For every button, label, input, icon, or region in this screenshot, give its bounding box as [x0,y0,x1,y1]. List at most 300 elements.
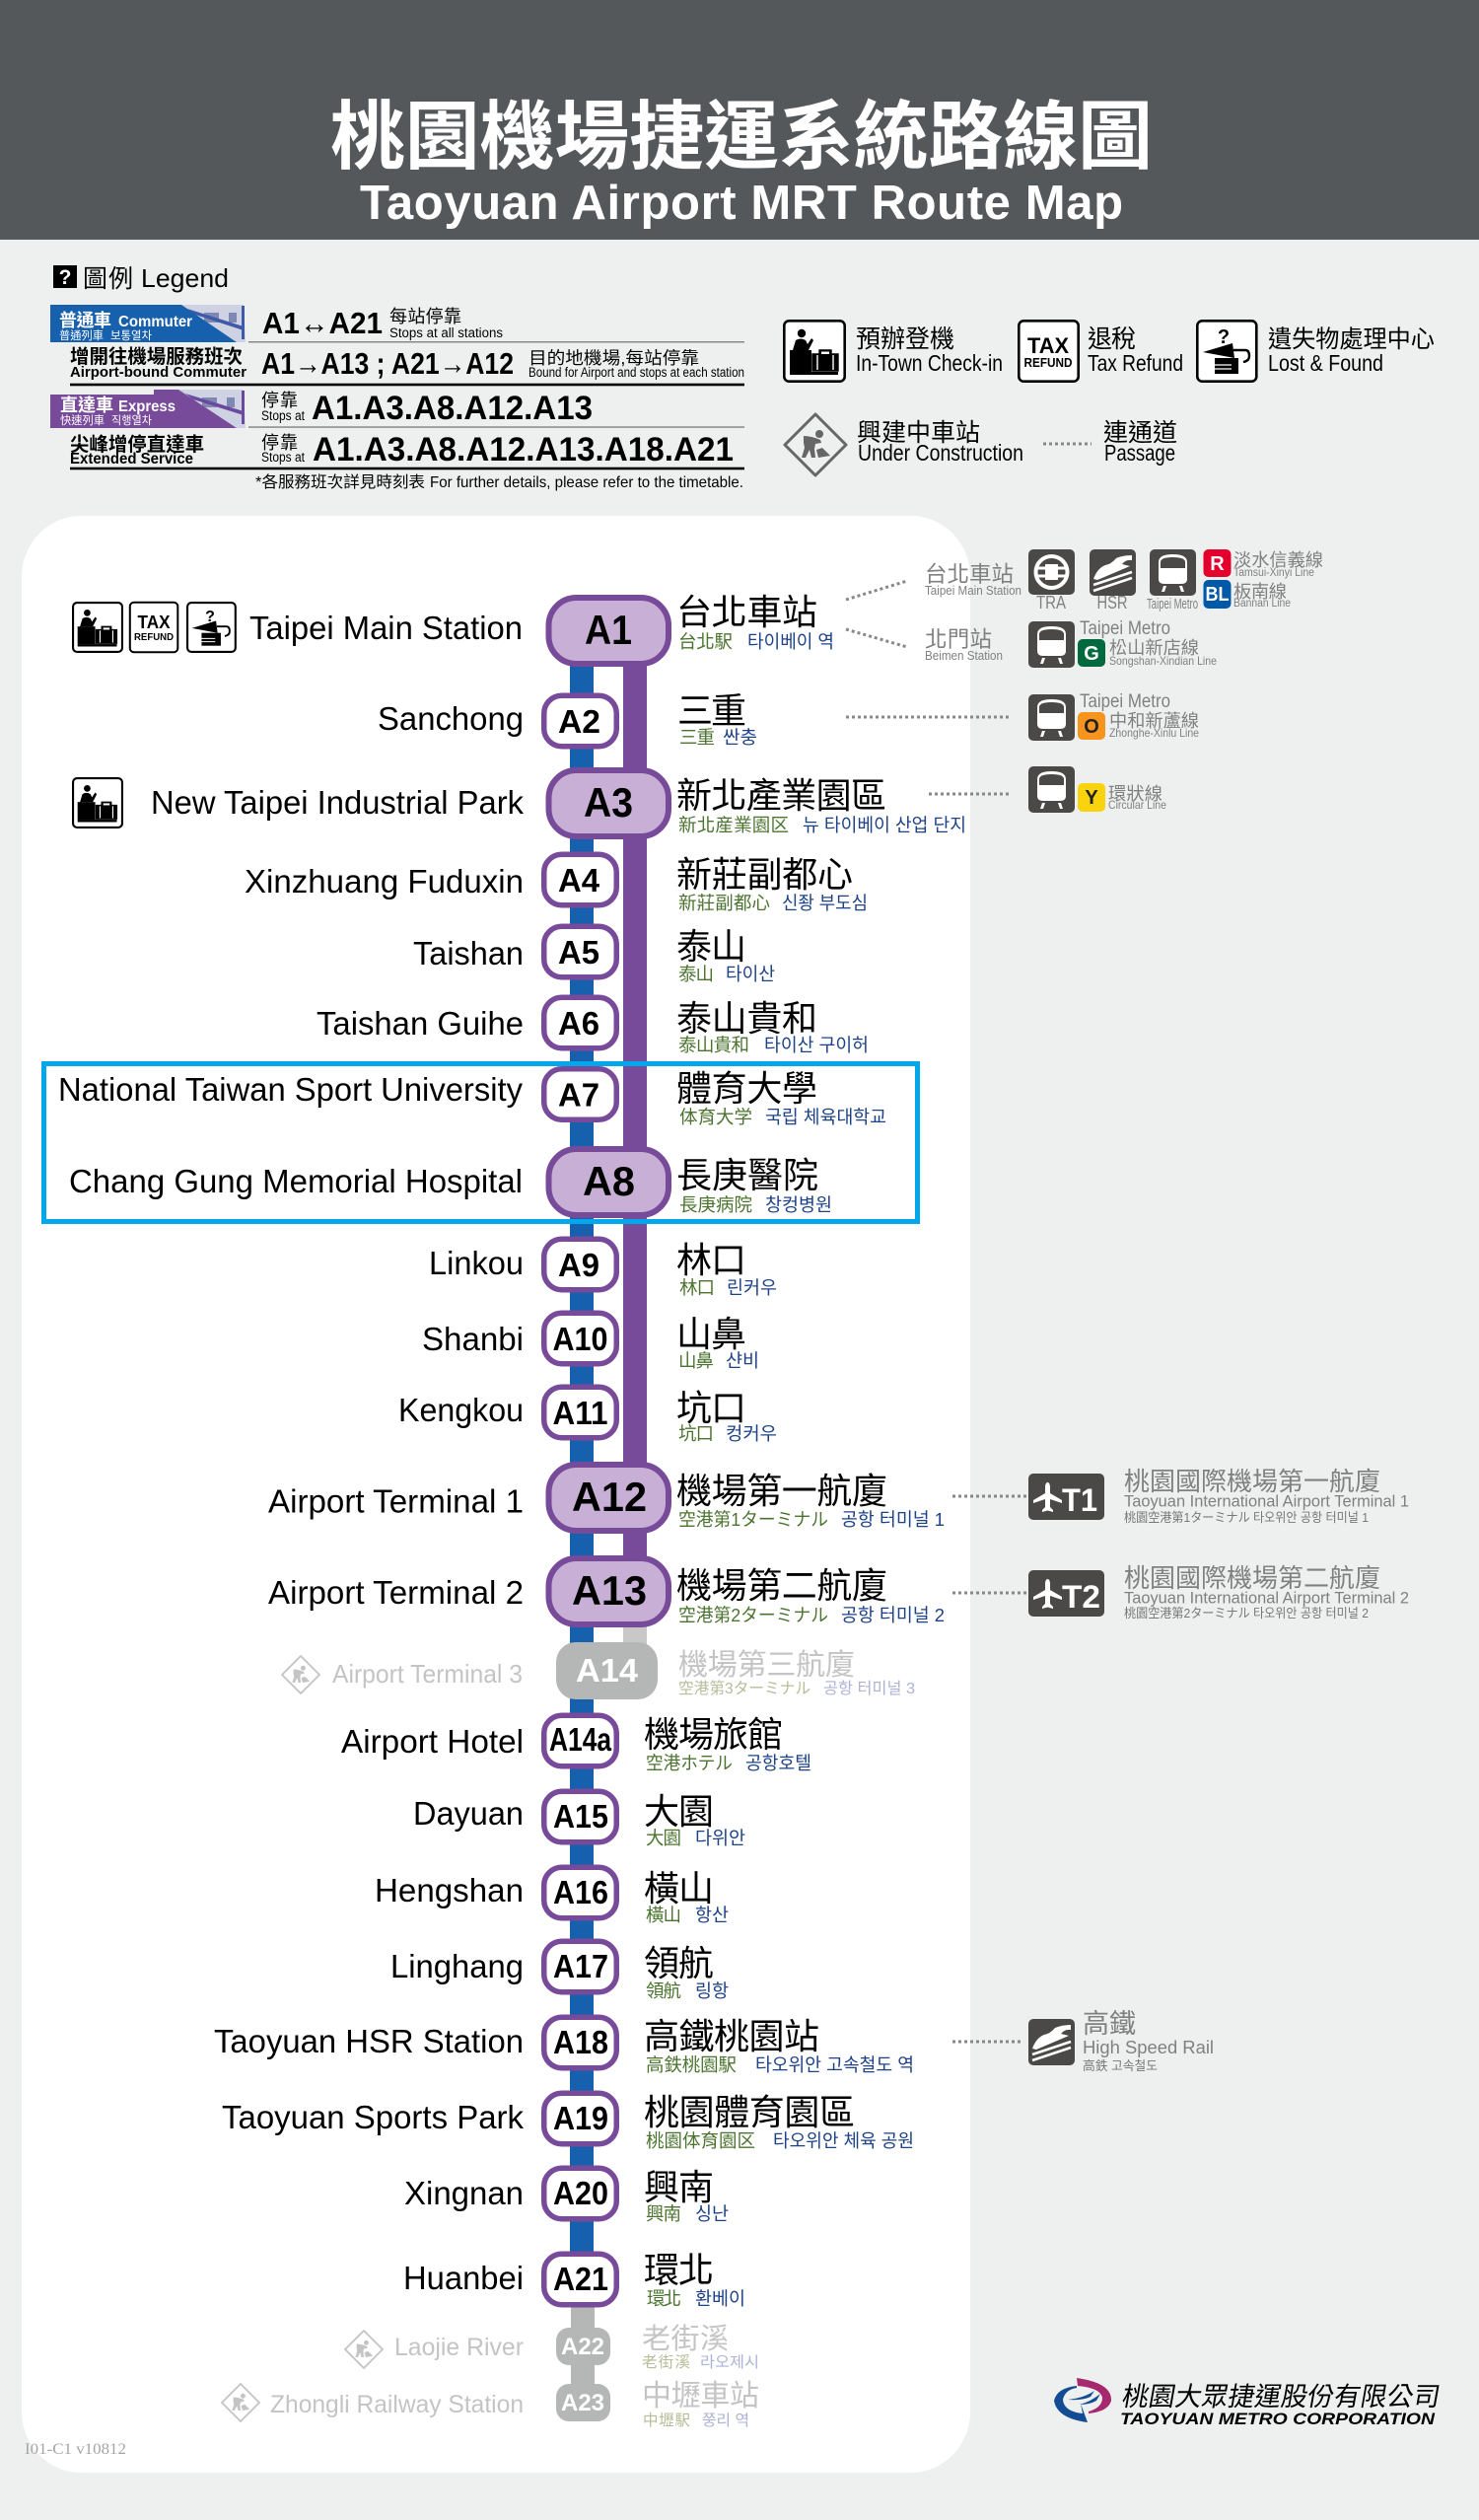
A12 Chinese name: 機場第一航廈 [676,1471,887,1511]
A7 English name: National Taiwan Sport University [58,1071,523,1108]
A12 translations [678,1509,945,1530]
A13 badge [548,1558,669,1624]
legend: lost and found: ? [1218,326,1230,348]
icon: tax refund: TAX [138,612,170,632]
passage to Taipei Main [846,581,907,600]
A21 translations [647,2288,745,2309]
A4 translations: 신좡 부도심 [782,893,868,913]
Songshan-Xindian line label: Taipei Metro [1080,618,1170,639]
station A1 [73,592,834,664]
A3 translations [678,815,966,835]
A18 English name: Taoyuan HSR Station [214,2023,524,2059]
High Speed Rail label: High Speed Rail [1083,2038,1214,2057]
A6 badge: A6 [558,1005,599,1042]
icon: HSR [1028,2019,1075,2065]
A9 badge [544,1239,616,1290]
A17 translations [646,1980,729,2001]
A12 translations: 공항 터미널 1 [841,1509,945,1530]
A3 badge [548,770,669,836]
A23 badge: A23 [561,2390,604,2416]
commuter service row: A1↔A21 [262,306,383,340]
A1 Chinese name: 台北車站 [676,592,817,632]
A9 translations: 林口 [679,1277,715,1298]
A10 translations: 샨비 [726,1350,759,1371]
A13 translations [678,1605,945,1625]
commuter service row [248,306,744,343]
A5 translations: 泰山 [678,964,714,984]
legend heading: ? [59,266,71,289]
A2 Chinese name: 三重 [677,690,746,731]
icon: Taipei Metro: Taipei Metro [1147,596,1198,612]
A18 Chinese name: 高鐵桃園站 [644,2016,819,2056]
icon: Taipei Metro [1028,621,1075,668]
A20 translations: 싱난 [695,2203,729,2224]
extended service row: 尖峰增停直達車 [70,434,204,456]
A14 translations: 공항 터미널 3 [823,1680,915,1697]
icon: in-town check-in [73,778,122,828]
A14 translations [678,1679,915,1697]
Terminal 1 label: 桃園空港第1ターミナル 타오위안 공항 터미널 1 [1124,1510,1369,1525]
Zhonghe-Xinlu line label: 中和新蘆線 [1109,711,1199,731]
icon: under construction [222,2384,259,2421]
A17 badge: A17 [553,1948,608,1984]
airport-bound commuter row: Bound for Airport and stops at each station [528,365,744,380]
Songshan-Xindian line label: 松山新店線 [1109,638,1199,658]
A19 Chinese name: 桃園體育園區 [644,2092,855,2132]
A8 translations: 長庚病院 [679,1194,752,1215]
A4 English name: Xinzhuang Fuduxin [245,863,524,900]
A3 translations: 뉴 타이베이 산업 단지 [803,815,966,835]
A11 Chinese name: 坑口 [676,1388,746,1428]
A2 translations: 三重 [679,727,715,748]
A14a English name: Airport Hotel [341,1723,524,1760]
A16 badge: A16 [553,1874,608,1910]
passage [952,1495,1028,1497]
A14a badge: A14a [549,1721,612,1758]
Tamsui-Xinyi line badge: R [1210,553,1225,575]
Terminal 1 label: 桃園國際機場第一航廈 [1124,1467,1380,1496]
Tamsui-Xinyi line badge: Tamsui-Xinyi Line [1233,567,1314,579]
A19 translations: 桃園体育園区 [646,2130,755,2151]
transfer: Airport Terminal 1 [952,1467,1409,1525]
A23 translations [643,2412,749,2429]
A14a translations: 空港ホテル [646,1753,733,1773]
highlight box around A7 and A8 [43,1063,917,1221]
A20 translations [646,2203,729,2224]
A21 badge: A21 [553,2261,608,2297]
A20 badge: A20 [553,2175,608,2211]
A4 badge: A4 [558,862,600,899]
Bannan line badge [1203,580,1291,610]
A9 Chinese name: 林口 [676,1240,746,1280]
A12 translations: 空港第1ターミナル [678,1509,828,1530]
transfer: New Taipei Industrial Park [929,766,1166,813]
commuter service row: Stops at all stations [389,325,503,340]
A17 English name: Linghang [390,1948,524,1984]
A15 translations: 大園 [646,1828,681,1848]
express service row: 停靠 [261,391,298,410]
Taipei Main label [925,562,1021,598]
A1 translations: 타이베이 역 [747,631,834,652]
airport-bound commuter row: A1→A13 ; A21→A12 [261,346,514,381]
station A3 [73,770,966,836]
A15 English name: Dayuan [413,1795,524,1832]
A23 English name: Zhongli Railway Station [270,2391,524,2418]
A22 badge: A22 [561,2334,604,2360]
A16 translations [646,1905,729,1925]
A8 English name: Chang Gung Memorial Hospital [69,1163,523,1199]
A11 badge [544,1387,616,1438]
Beimen label: Beimen Station [925,648,1003,663]
legend: under construction [785,414,1023,475]
High Speed Rail label [1083,2009,1214,2073]
A9 badge: A9 [558,1247,599,1283]
A23 Chinese name: 中壢車站 [642,2380,759,2412]
station A23 under construction [222,2380,759,2429]
A19 translations [646,2130,914,2151]
A19 badge: A19 [553,2100,608,2136]
A21 translations: 환베이 [695,2288,745,2309]
A5 English name: Taishan [413,935,524,972]
icon: T1 [1028,1474,1104,1520]
A10 badge [544,1313,616,1364]
Terminal 2 label: 桃園空港第2ターミナル 타오위안 공항 터미널 2 [1124,1606,1369,1620]
legend: lost and found: 遺失物處理中心 [1268,326,1435,353]
A1 badge: A1 [585,607,632,653]
transfer: Airport Terminal 2 [952,1563,1409,1620]
A16 English name: Hengshan [375,1872,524,1908]
A11 badge: A11 [552,1395,607,1431]
A15 translations: 다위안 [695,1828,745,1848]
A16 translations: 橫山 [646,1905,681,1925]
A14 English name: Airport Terminal 3 [332,1659,523,1689]
A14a translations: 공항호텔 [745,1753,811,1773]
Taipei Main label: 台北車站 [925,562,1014,587]
A11 translations: 坑口 [678,1423,714,1444]
A2 badge [544,695,616,747]
A20 badge [544,2168,616,2219]
Taipei Main label: Taipei Main Station [925,583,1021,598]
legend: tax refund [1019,321,1183,382]
express banner: 快速列車 [60,413,105,427]
A3 Chinese name: 新北產業園區 [676,775,886,816]
A5 translations [678,964,775,984]
A14a badge [544,1715,616,1766]
A13 translations: 空港第2ターミナル [678,1605,828,1625]
A2 translations [679,727,757,748]
icon: in-town check-in [73,603,122,652]
A18 translations: 타오위안 고속철도 역 [755,2054,914,2075]
A12 badge: A12 [572,1474,647,1520]
A20 Chinese name: 興南 [644,2167,714,2207]
commuter banner: 普通列車 [59,328,104,342]
station A16 [375,1867,729,1925]
commuter banner [50,305,246,342]
icon: under construction [282,1656,319,1693]
A16 Chinese name: 橫山 [644,1868,714,1908]
A21 English name: Huanbei [403,2260,524,2296]
logo English name: TAOYUAN METRO CORPORATION [1120,2410,1436,2428]
icon: tax refund [130,603,177,652]
Songshan-Xindian line label: Songshan-Xindian Line [1109,654,1217,668]
express service row: A1.A3.A8.A12.A13 [312,390,593,427]
station A14 under construction [282,1642,915,1699]
A4 translations: 新莊副都心 [678,893,770,913]
version code: I01-C1 v10812 [25,2441,126,2458]
passage to Beimen [846,629,907,647]
A7 translations: 국립 체육대학교 [765,1107,886,1127]
A3 translations: 新北産業園区 [678,815,789,835]
A17 translations: 領航 [646,1980,681,2001]
A8 translations: 창컹병원 [765,1194,832,1215]
legend heading: 圖例 [83,265,133,293]
Songshan-Xindian line label [1078,618,1217,668]
legend: tax refund: 退稅 [1088,325,1136,353]
icon: HSR: HSR [1096,593,1128,612]
A10 English name: Shanbi [422,1321,524,1357]
A13 badge: A13 [572,1567,647,1614]
Terminal 1 label [1124,1467,1409,1525]
legend: under construction: 興建中車站 [857,419,980,447]
A22 translations: 老街溪 [642,2353,690,2371]
A10 badge: A10 [552,1321,607,1357]
A23 translations: 쭝리 역 [702,2412,749,2429]
station A2 [378,690,757,748]
express banner: 直達車 [60,395,113,415]
legend: passage: 連通道 [1103,419,1177,447]
Zhonghe-Xinlu line label [1078,691,1199,740]
timetable note: For further details, please refer to the timetable. [430,474,743,491]
A15 Chinese name: 大園 [644,1791,714,1832]
Songshan-Xindian line label: G [1084,643,1099,665]
A14 translations: 空港第3ターミナル [678,1679,810,1697]
station A5 [413,926,775,984]
A22 translations [642,2353,759,2371]
A16 translations: 항산 [695,1905,729,1925]
A5 badge [544,926,616,977]
icon: TRA [1028,549,1075,612]
Zhonghe-Xinlu line label: Taipei Metro [1080,691,1170,712]
commuter banner: Commuter [118,314,192,330]
passage [952,1592,1028,1594]
Terminal 2 label [1124,1563,1409,1620]
passage [929,793,1012,795]
A21 translations: 環北 [647,2288,681,2309]
icon: HSR [1090,549,1136,612]
legend heading: Legend [141,263,229,293]
station A14a [341,1714,811,1773]
A20 translations: 興南 [646,2203,681,2224]
A7 translations [679,1107,886,1127]
A15 badge [544,1791,616,1842]
extended service row: Stops at [261,450,305,465]
icon: tax refund: REFUND [134,631,174,643]
airport-bound commuter row: 目的地機場,每站停靠 [528,348,699,368]
subtitle: Taoyuan Airport MRT Route Map [360,177,1123,230]
timetable note: *各服務班次詳見時刻表 [255,473,425,491]
legend: passage [1043,419,1177,466]
A22 translations: 라오제시 [700,2353,759,2371]
legend: in-town check-in: 預辦登機 [856,325,954,353]
A9 translations [679,1277,777,1298]
A4 translations [678,893,868,913]
express banner: Express [118,398,176,415]
panel: route map white card [22,516,970,2473]
A14 badge [556,1642,658,1699]
A6 translations [678,1035,869,1055]
A14a translations [646,1753,811,1773]
logo mark [1054,2378,1111,2422]
station A22 under construction [345,2323,759,2371]
A2 translations: 싼충 [723,727,757,748]
A14 badge: A14 [576,1652,639,1689]
A2 English name: Sanchong [378,700,524,737]
A18 translations: 高鉄桃園駅 [646,2054,737,2075]
Circular line label: 環狀線 [1108,784,1162,804]
A13 translations: 공항 터미널 2 [841,1605,945,1625]
A5 Chinese name: 泰山 [676,926,746,967]
A8 Chinese name: 長庚醫院 [676,1155,818,1195]
High Speed Rail label: 高鐵 [1083,2009,1136,2039]
icon: Taipei Metro [1147,549,1198,612]
A6 English name: Taishan Guihe [317,1005,524,1042]
station A7 [58,1068,886,1127]
icon: lost and found: ? [205,609,215,625]
A2 badge: A2 [558,703,600,740]
A6 Chinese name: 泰山貴和 [676,998,817,1039]
passage [846,716,1012,718]
Beimen label [925,627,1003,663]
icon: Taipei Metro [1028,694,1075,741]
extended service row: Extended Service [70,451,193,468]
A17 translations: 링항 [695,1980,729,2001]
Terminal 2 label: 桃園國際機場第二航廈 [1124,1563,1380,1593]
icon: TRA: TRA [1036,593,1066,612]
A6 badge [544,997,616,1048]
A1 translations [678,631,834,652]
Terminal 2 label: Taoyuan International Airport Terminal 2 [1124,1588,1409,1608]
A17 Chinese name: 領航 [644,1943,714,1983]
route lines [570,631,647,2403]
A1 badge [548,598,669,664]
A13 Chinese name: 機場第二航廈 [676,1565,887,1606]
legend: tax refund: Tax Refund [1088,350,1183,376]
legend: tax refund: REFUND [1023,355,1073,370]
legend: lost and found: Lost & Found [1268,350,1383,376]
A1 English name: Taipei Main Station [249,610,523,646]
A17 badge [544,1941,616,1992]
A14a Chinese name: 機場旅館 [644,1714,783,1755]
Tamsui-Xinyi line badge: 淡水信義線 [1233,550,1323,570]
station A8 [69,1149,832,1215]
airport-bound commuter row [70,346,744,386]
airport-bound commuter row: Airport-bound Commuter [70,364,246,381]
station A19 [222,2092,914,2151]
Circular line label [1078,783,1166,812]
Taoyuan Metro Corporation logo [1054,2378,1443,2428]
A6 translations: 泰山貴和 [678,1035,749,1055]
A1 translations: 台北駅 [678,631,733,652]
A23 translations: 中壢駅 [643,2412,690,2429]
Bannan line badge: Bannan Line [1233,598,1291,610]
A22 badge [556,2328,610,2365]
title: 桃園機場捷運系統路線圖 [330,96,1153,180]
logo Chinese name: 桃園大眾捷運股份有限公司 [1120,2382,1443,2412]
passage [952,2040,1022,2044]
Beimen label: 北門站 [925,627,992,652]
A11 English name: Kengkou [398,1392,524,1428]
station A20 [404,2167,729,2224]
station A9 [429,1239,777,1298]
A22 Chinese name: 老街溪 [642,2323,729,2355]
airport-bound commuter row: 增開往機場服務班次 [70,346,243,368]
A9 translations: 린커우 [727,1277,777,1298]
A14 Chinese name: 機場第三航廈 [678,1649,855,1682]
Terminal 1 label: Taoyuan International Airport Terminal 1 [1124,1491,1409,1511]
commuter banner: 보통열차 [110,329,152,342]
A8 badge: A8 [583,1158,635,1204]
A7 translations: 体育大学 [679,1107,752,1127]
A9 English name: Linkou [429,1245,524,1281]
A12 English name: Airport Terminal 1 [268,1483,524,1519]
High Speed Rail label: 高鉄 고속철도 [1083,2058,1158,2073]
express banner [50,390,246,428]
icon: lost and found [187,603,236,652]
legend: in-town check-in: In-Town Check-in [856,350,1003,376]
commuter banner: 普通車 [59,311,111,330]
A13 English name: Airport Terminal 2 [268,1574,524,1611]
header banner [0,0,1479,240]
station A6 [317,997,869,1055]
extended service row: 停靠 [261,433,298,453]
legend: passage: Passage [1104,440,1175,466]
station A21 [403,2250,745,2309]
Bannan line badge: BL [1205,584,1229,606]
A11 translations: 컹커우 [726,1423,777,1444]
station A10 [422,1313,759,1371]
station A18 [214,2016,914,2075]
transfer: Beimen Station [846,618,1217,668]
extended service row [70,431,744,469]
legend: in-town check-in [784,321,1003,382]
icon: T2: T2 [1062,1579,1100,1615]
A4 badge [544,854,616,905]
transfer: Taipei Main Station [846,549,1323,612]
A16 badge [544,1867,616,1918]
transfer: High Speed Rail [952,2009,1214,2073]
legend heading [53,263,229,293]
A3 badge: A3 [584,779,633,826]
Zhonghe-Xinlu line label: Zhonghe-Xinlu Line [1109,726,1199,740]
legend: lost and found [1197,321,1435,382]
A3 English name: New Taipei Industrial Park [151,784,524,821]
Circular line label: Y [1085,787,1098,809]
station A11 [398,1387,777,1444]
legend: tax refund: TAX [1027,333,1069,358]
station A12 [268,1465,945,1531]
A8 badge [548,1149,669,1215]
A21 badge [544,2254,616,2305]
Circular line label: Circular Line [1108,798,1166,812]
A18 translations [646,2054,914,2075]
A5 translations: 타이산 [726,964,775,984]
A19 English name: Taoyuan Sports Park [222,2099,524,2135]
A6 translations: 타이산 구이허 [764,1035,869,1055]
A10 translations [678,1350,759,1371]
A20 English name: Xingnan [404,2175,524,2211]
A22 English name: Laojie River [394,2334,524,2361]
icon: under construction [345,2331,383,2368]
